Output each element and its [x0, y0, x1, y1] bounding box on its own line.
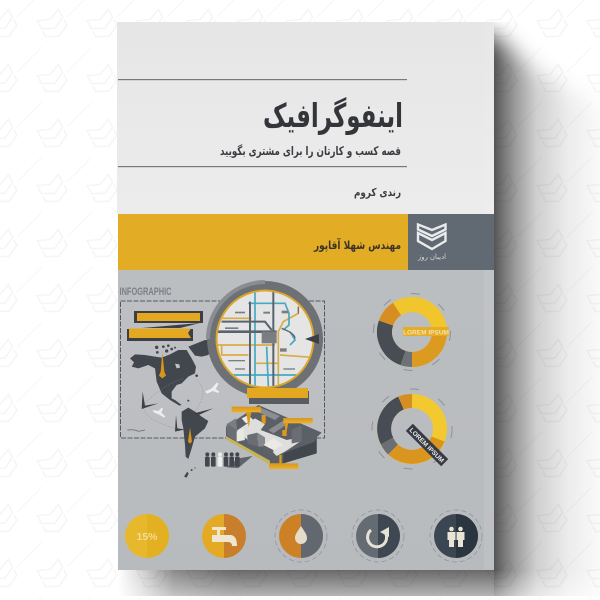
yellow map pins	[159, 352, 192, 444]
magnifier with subway map	[207, 281, 323, 404]
donut chart two	[372, 389, 452, 469]
donut label ribbon: LOREM IPSUM	[408, 427, 445, 464]
subtitle: قصه کسب و کارتان را برای مشتری بگویید	[220, 144, 401, 159]
donut chart one	[374, 294, 450, 370]
greenland	[188, 340, 212, 357]
icon: refresh arrow	[352, 510, 404, 562]
book drop shadow	[118, 0, 600, 596]
cubes	[227, 407, 302, 457]
book cover	[117, 22, 494, 570]
small scattered islands	[184, 467, 196, 478]
book title: اینفوگرافیک	[263, 96, 403, 136]
front kerb	[226, 436, 270, 465]
icon: 15 percent	[125, 514, 169, 558]
icon: two people	[430, 510, 482, 562]
floor	[237, 418, 302, 456]
cover lower grey area	[118, 270, 494, 570]
planes	[153, 383, 219, 418]
map panel	[120, 301, 324, 459]
publisher block	[408, 214, 494, 270]
publisher logo	[417, 224, 446, 261]
donut label	[403, 327, 449, 336]
publisher logo: ادیبان روز	[417, 253, 446, 261]
yellow ribbon one	[134, 311, 203, 323]
ribbon stems	[246, 412, 288, 463]
dashed frame	[120, 301, 324, 438]
translator name: مهندس شهلا آقاپور	[313, 238, 401, 253]
arctic islands	[155, 344, 198, 402]
isometric city block	[226, 405, 322, 469]
donut chart one: LOREM IPSUM	[403, 329, 449, 336]
north america	[130, 350, 196, 406]
donut ticks	[372, 389, 452, 469]
ribbon below lens	[247, 388, 309, 404]
yellow ribbon two	[127, 328, 193, 341]
ruler squiggle	[127, 430, 145, 431]
hudson bay	[175, 364, 180, 368]
dark spike markers	[142, 392, 213, 432]
south america	[182, 408, 208, 459]
right wall	[283, 437, 317, 463]
icon: water tap	[202, 514, 246, 558]
tag ribbons	[232, 407, 313, 469]
rule bottom	[118, 166, 407, 167]
row of people	[205, 452, 253, 468]
donut ticks	[374, 294, 450, 370]
lens pointer	[305, 334, 319, 344]
magnifier ring	[207, 281, 323, 397]
base	[226, 405, 322, 463]
flight arcs	[143, 378, 203, 428]
label: infographic: INFOGRAPHIC	[120, 286, 172, 298]
author: رندی کروم	[354, 186, 401, 199]
icon: 15 percent: 15%	[136, 531, 158, 543]
spine highlight	[484, 22, 494, 570]
yellow band	[118, 214, 408, 270]
rule top	[118, 79, 407, 80]
world map shapes	[127, 340, 219, 459]
ribbon fold shadow	[142, 323, 200, 328]
cover upper white area	[117, 22, 494, 214]
lens map	[218, 292, 312, 386]
icon: water drop	[275, 510, 327, 562]
